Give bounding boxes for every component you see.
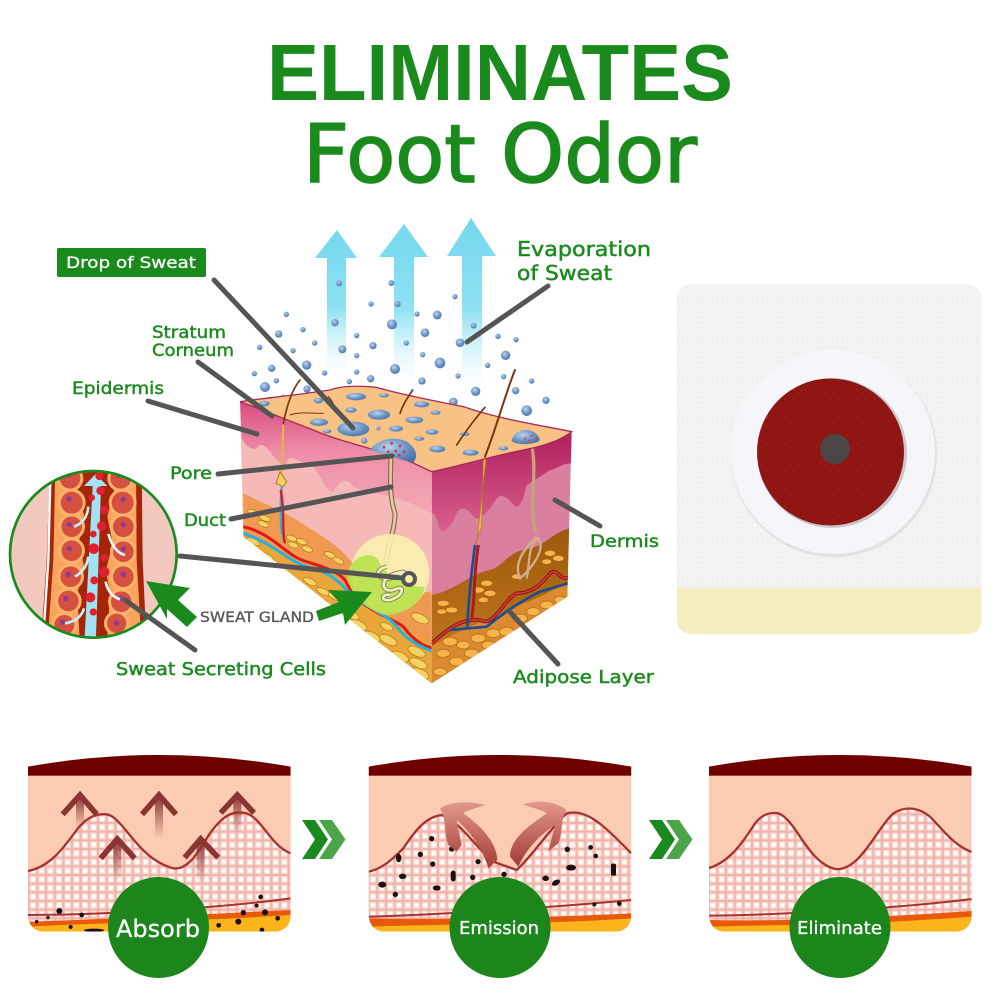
gland pointer ring <box>403 573 415 585</box>
badge: absorb <box>108 877 209 978</box>
evaporation arrows <box>315 218 496 385</box>
sweat gland magnified inset <box>7 465 180 647</box>
upward arrows <box>63 795 254 882</box>
right face <box>430 430 573 687</box>
badge: eliminate: Eliminate <box>797 918 882 939</box>
labels: Drop of Sweat <box>66 253 196 272</box>
labels <box>57 237 659 688</box>
product patch <box>677 284 982 634</box>
badge: emission: Emission <box>459 918 539 939</box>
labels: Stratum <box>152 323 226 343</box>
hairs <box>283 370 515 457</box>
step panel: emission <box>367 752 633 935</box>
badge: emission <box>450 877 550 978</box>
labels: Evaporation <box>517 237 651 261</box>
labels: SWEAT GLAND <box>200 610 314 626</box>
chevron arrow 1 <box>302 820 346 859</box>
green arrow to inset <box>146 581 197 627</box>
step panel: absorb <box>27 752 293 935</box>
chevron arrow 2 <box>649 820 692 859</box>
green arrow to gland <box>316 590 372 625</box>
badge: eliminate <box>790 877 890 978</box>
labels: of Sweat <box>517 261 612 285</box>
badge: absorb: Absorb <box>116 915 200 943</box>
labels: Duct <box>184 511 226 531</box>
title <box>267 28 733 201</box>
skin cross-section cube <box>237 370 573 687</box>
labels: Adipose Layer <box>513 667 655 688</box>
labels: Dermis <box>590 532 659 552</box>
sweat droplets <box>252 280 550 416</box>
sweat duct and hair follicle <box>276 425 395 567</box>
labels: Sweat Secreting Cells <box>116 659 326 680</box>
emission arrows <box>440 802 567 868</box>
labels: Pore <box>170 464 212 484</box>
labels: Corneum <box>152 341 234 361</box>
labels: Epidermis <box>72 379 164 399</box>
top surface <box>240 386 572 472</box>
leader lines <box>148 280 600 664</box>
drops on skin surface <box>259 393 540 463</box>
title: ELIMINATES <box>267 28 733 117</box>
step panel: eliminate <box>707 752 973 935</box>
inset line to sweat secreting cells <box>125 600 195 650</box>
left face <box>237 397 437 687</box>
title: Foot Odor <box>303 108 697 201</box>
highlighted sweat gland <box>347 534 429 615</box>
